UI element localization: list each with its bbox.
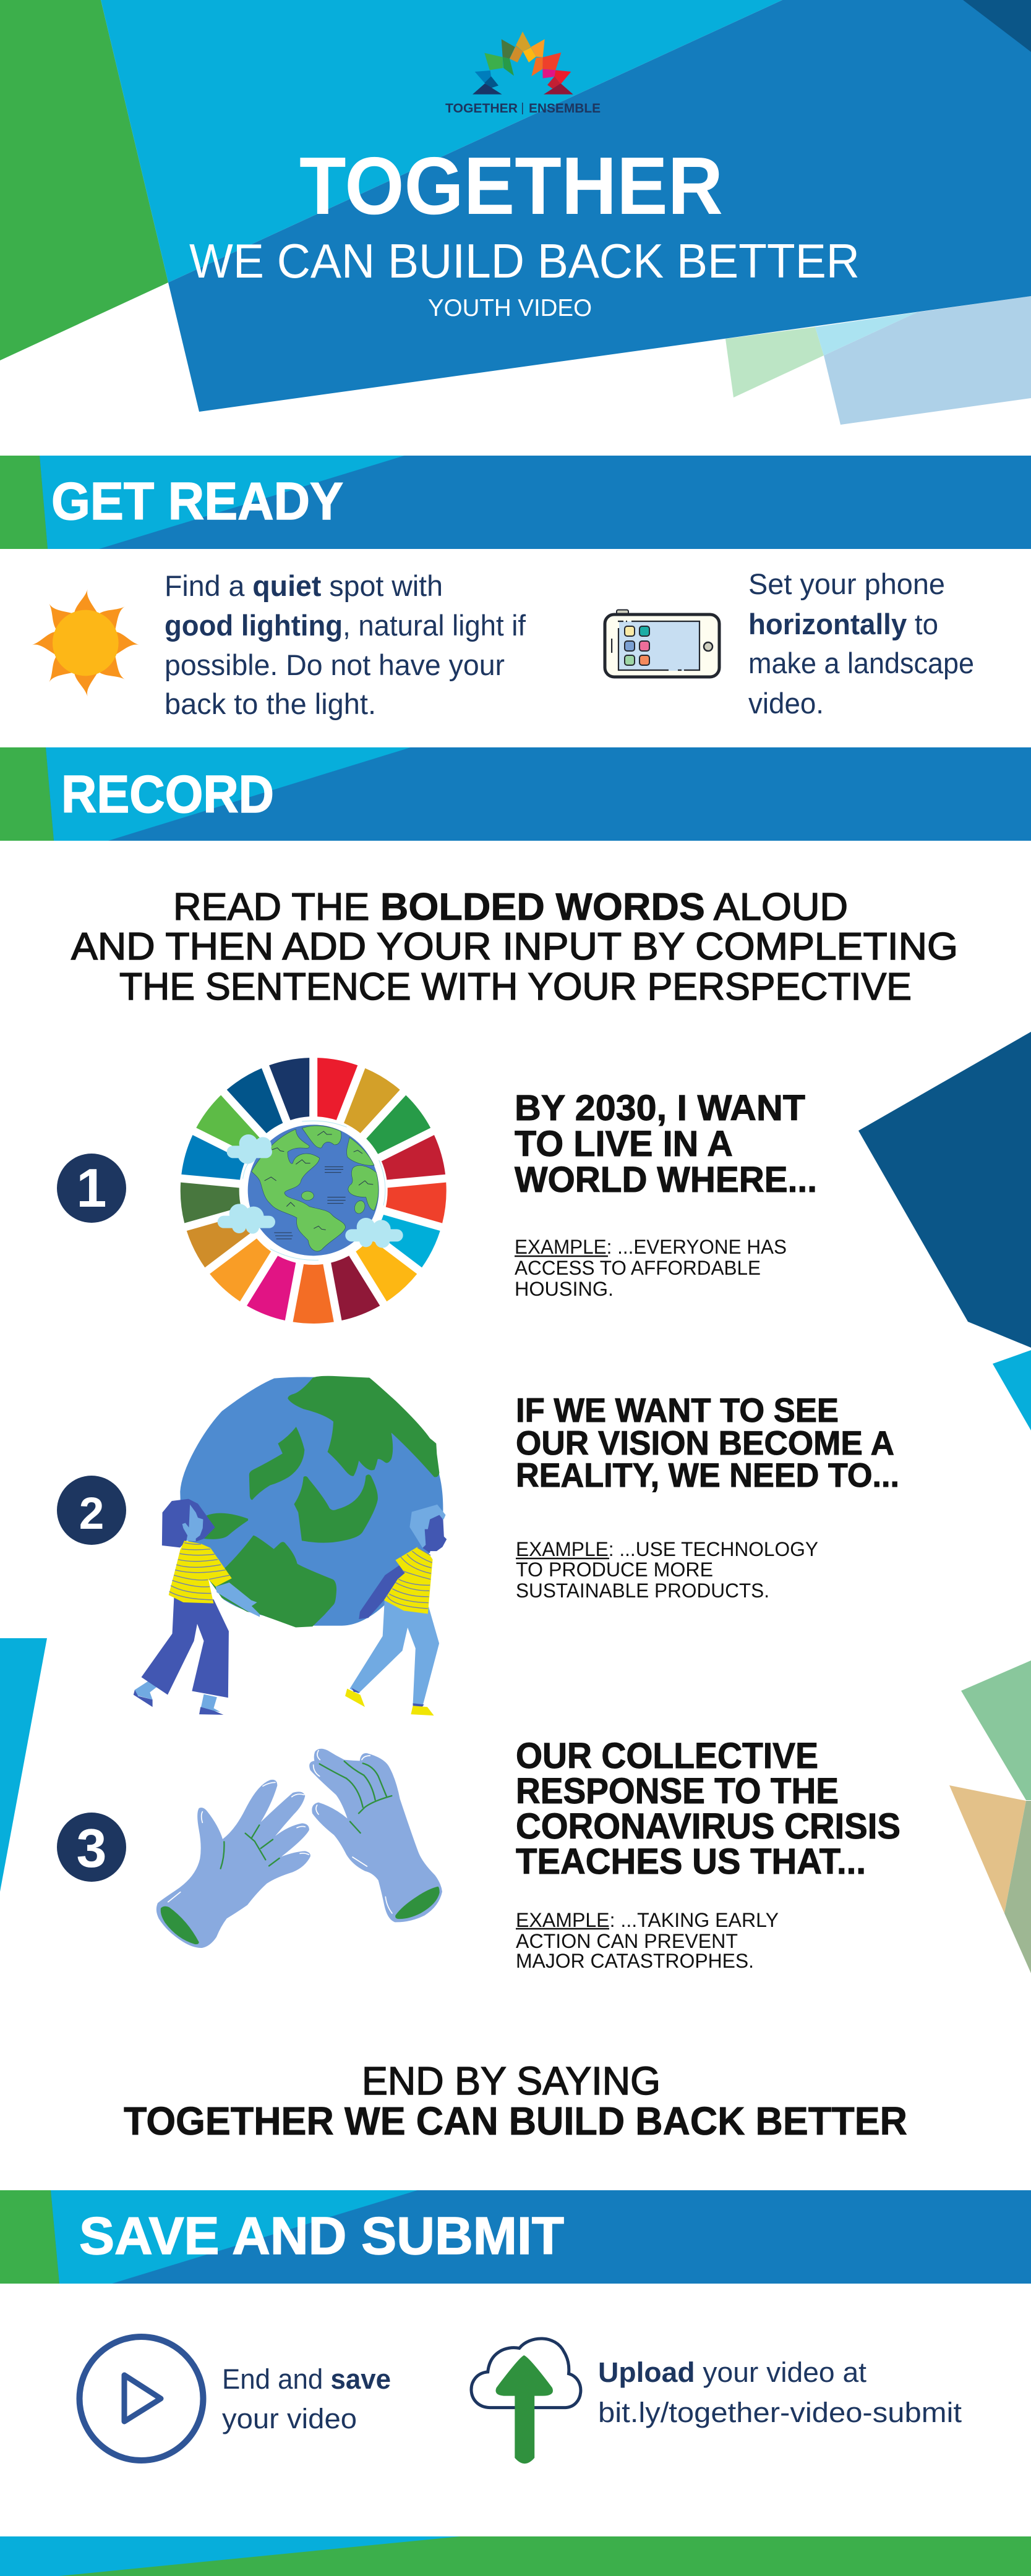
text block: set your phone [748, 567, 974, 720]
person: left girl [134, 1499, 260, 1715]
example 2 [516, 1538, 818, 1602]
text block: find a quiet spot: good lighting, natural light if [165, 609, 526, 642]
instructions heading: AND THEN ADD YOUR INPUT BY COMPLETING [71, 925, 958, 968]
section bar: get ready [0, 456, 1031, 549]
text block: end and save: your video [222, 2403, 357, 2434]
logo: Together Ensemble: ENSEMBLE [529, 101, 601, 116]
question 3 text: OUR COLLECTIVE [516, 1736, 818, 1776]
logo: Together Ensemble: TOGETHER [445, 101, 518, 116]
question 1 text: WORLD WHERE... [515, 1160, 817, 1200]
text block: set your phone: video. [748, 687, 824, 720]
text block: end and save [222, 2363, 391, 2434]
closing statement: TOGETHER WE CAN BUILD BACK BETTER [124, 2099, 907, 2143]
example 1: ACCESS TO AFFORDABLE [515, 1257, 761, 1279]
example 1 [515, 1236, 787, 1300]
globe [218, 1121, 403, 1260]
icon: play button [79, 2337, 203, 2460]
example 3: ACTION CAN PREVENT [516, 1930, 738, 1952]
text block: find a quiet spot: back to the light. [165, 687, 376, 720]
clouds [218, 1134, 403, 1248]
closing statement [124, 2059, 907, 2143]
number badge 3: 3 [77, 1817, 106, 1879]
logo: Together Ensemble [445, 32, 601, 116]
question 2 text [516, 1391, 899, 1494]
tagline: YOUTH VIDEO [428, 295, 592, 321]
section bar: record [0, 747, 1031, 841]
question 2 text: OUR VISION BECOME A [516, 1424, 894, 1462]
number badge 2: 2 [79, 1489, 104, 1539]
illustration: two people carrying the earth [134, 1376, 447, 1715]
example 2: SUSTAINABLE PRODUCTS. [516, 1579, 769, 1602]
decorative side shapes [0, 1032, 1031, 1973]
instructions heading: THE SENTENCE WITH YOUR PERSPECTIVE [119, 966, 912, 1008]
question 3 text [516, 1736, 901, 1882]
question 3 text: CORONAVIRUS CRISIS [516, 1806, 901, 1847]
right glove [309, 1749, 442, 1922]
wheel segments [173, 1051, 452, 1329]
text block: set your phone: make a landscape [748, 647, 974, 679]
number badge 2 [57, 1476, 126, 1545]
text block: upload your video: bit.ly/together-video-submit [598, 2397, 962, 2428]
instructions heading: READ THE BOLDED WORDS ALOUD [173, 886, 848, 929]
example 2: TO PRODUCE MORE [516, 1558, 713, 1581]
icon: sun [32, 589, 139, 697]
section bar: record: RECORD [61, 765, 274, 824]
text block: find a quiet spot: Find a quiet spot with [165, 569, 443, 602]
example 3 [516, 1909, 779, 1972]
earth [180, 1376, 443, 1627]
text block: set your phone: horizontally to [748, 608, 938, 640]
question 1 text [515, 1088, 817, 1200]
question 3 text: RESPONSE TO THE [516, 1771, 839, 1811]
title: TOGETHER [299, 140, 723, 231]
illustration: gloved hands [156, 1749, 442, 1948]
person: right boy [345, 1505, 447, 1715]
footer band [0, 2536, 1031, 2576]
example 1: HOUSING. [515, 1278, 614, 1300]
header background shapes [0, 0, 1031, 425]
example 2: EXAMPLE: ...USE TECHNOLOGY [516, 1538, 818, 1560]
question 1 text: BY 2030, I WANT [515, 1088, 805, 1128]
number badge 3 [57, 1813, 126, 1882]
closing statement: END BY SAYING [362, 2059, 661, 2103]
example 1: EXAMPLE: ...EVERYONE HAS [515, 1236, 787, 1258]
panel: header banner [0, 0, 1031, 425]
number badge 1: 1 [77, 1157, 106, 1218]
text block: find a quiet spot: possible. Do not have your [165, 648, 505, 681]
question 2 text: IF WE WANT TO SEE [516, 1391, 839, 1429]
icon: phone held horizontally [605, 610, 719, 677]
left glove [156, 1780, 310, 1948]
text block: set your phone: Set your phone [748, 567, 945, 600]
example 3: EXAMPLE: ...TAKING EARLY [516, 1909, 779, 1931]
subtitle: WE CAN BUILD BACK BETTER [189, 234, 860, 288]
text block: end and save: End and save [222, 2363, 391, 2395]
text block: find a quiet spot [165, 569, 526, 720]
number badge 1 [57, 1154, 126, 1223]
example 3: MAJOR CATASTROPHES. [516, 1950, 754, 1972]
text block: upload your video [598, 2357, 962, 2428]
icon: cloud upload arrow [471, 2339, 581, 2463]
section bar: save and submit [0, 2190, 1031, 2284]
question 3 text: TEACHES US THAT... [516, 1842, 866, 1882]
SDG colour wheel with globe [173, 1051, 452, 1329]
question 1 text: TO LIVE IN A [515, 1124, 733, 1164]
section bar: get ready: GET READY [51, 472, 343, 531]
text block: upload your video: Upload your video at [598, 2357, 867, 2388]
section bar: save and submit: SAVE AND SUBMIT [79, 2207, 564, 2266]
question 2 text: REALITY, WE NEED TO... [516, 1456, 899, 1494]
instructions heading [71, 886, 958, 1008]
